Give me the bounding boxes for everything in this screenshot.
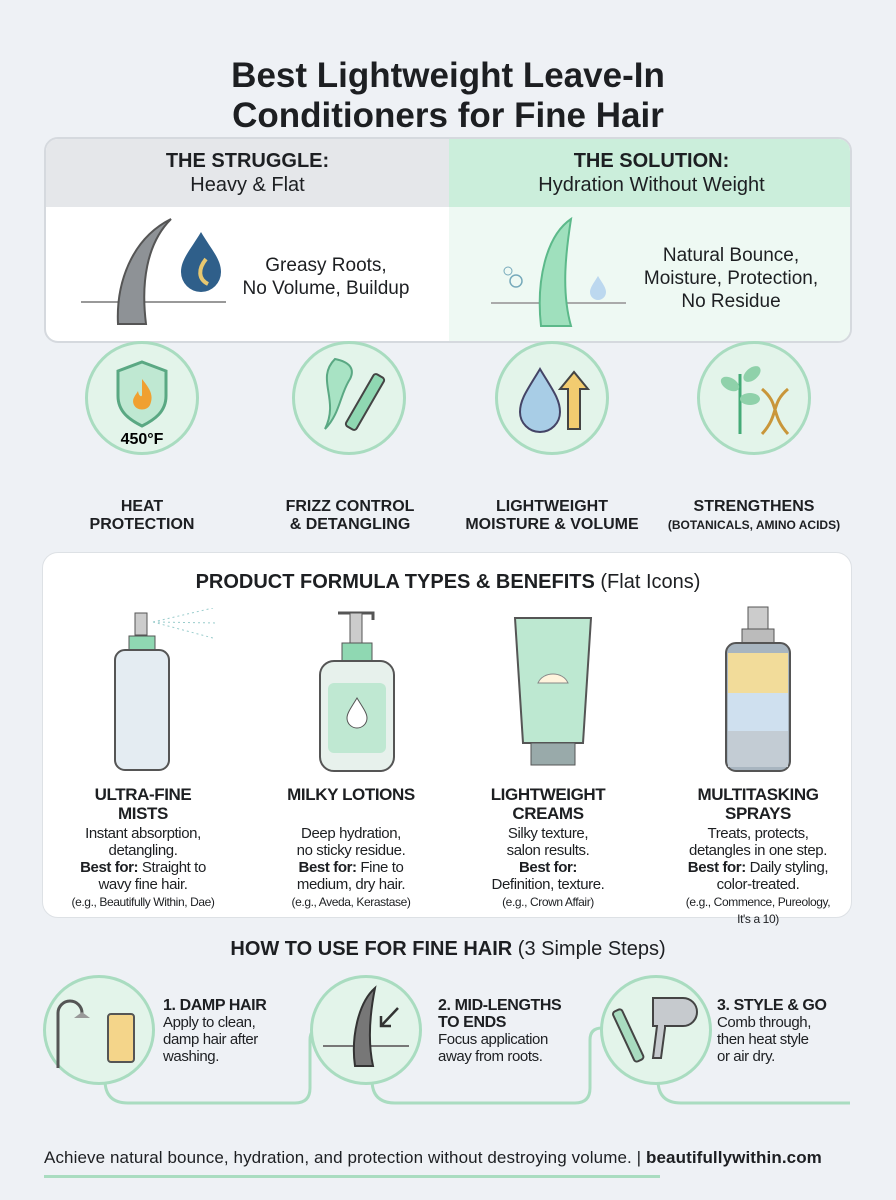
- footer: Achieve natural bounce, hydration, and protection without destroying volume. | beautifullywithin.com: [44, 1148, 822, 1167]
- product: creams: CREAMS: [512, 804, 584, 823]
- title: Best Lightweight Leave-In: [231, 56, 665, 95]
- product: mists: wavy fine hair.: [98, 876, 188, 893]
- product: creams: Silky texture,: [508, 825, 588, 842]
- product: sprays: Treats, protects,: [707, 825, 808, 842]
- solution header: [449, 139, 854, 207]
- solution text: Moisture, Protection,: [644, 268, 818, 289]
- product: creams: Best for:: [519, 859, 577, 876]
- product: mists: ULTRA-FINE: [95, 785, 191, 804]
- product: sprays: detangles in one step.: [689, 842, 827, 859]
- product: lotions: no sticky residue.: [297, 842, 405, 859]
- product: sprays: SPRAYS: [725, 804, 791, 823]
- icon: heat protection: [85, 341, 199, 455]
- solution text: Natural Bounce,: [663, 245, 799, 266]
- icon: multitasking spray: [725, 606, 791, 772]
- connector lines: [104, 1026, 850, 1104]
- icon: light hair strand: [491, 217, 626, 327]
- step 2: Focus application: [438, 1031, 548, 1048]
- icon: comb and dryer: [600, 975, 712, 1085]
- step 2: away from roots.: [438, 1048, 542, 1065]
- icon row: benefits: [85, 341, 840, 533]
- step 2: TO ENDS: [438, 1014, 506, 1031]
- product: mists: [72, 785, 214, 909]
- icon row: benefits: HEAT: [121, 498, 163, 515]
- icon row: benefits: LIGHTWEIGHT: [496, 498, 608, 515]
- icon: cream tube: [514, 617, 592, 766]
- solution header: THE SOLUTION:: [574, 150, 729, 172]
- struggle header: THE STRUGGLE:: [166, 150, 329, 172]
- product: creams: [491, 785, 606, 909]
- product: sprays: MULTITASKING: [697, 785, 819, 804]
- section heading: how to use: HOW TO USE FOR FINE HAIR (3 Simple Steps): [230, 938, 666, 960]
- icon row: benefits: FRIZZ CONTROL: [286, 498, 414, 515]
- step 3: 3. STYLE & GO: [717, 997, 826, 1014]
- icon row: benefits: (BOTANICALS, AMINO ACIDS): [668, 518, 840, 532]
- icon: lotion bottle: [319, 612, 395, 772]
- solution text: [644, 245, 818, 312]
- icon: shower: [43, 975, 155, 1085]
- product: mists: MISTS: [118, 804, 168, 823]
- solution text: No Residue: [681, 291, 781, 312]
- solution header: Hydration Without Weight: [538, 174, 765, 196]
- product: sprays: color-treated.: [717, 876, 799, 893]
- product: creams: Definition, texture.: [492, 876, 604, 893]
- struggle header: Heavy & Flat: [190, 174, 305, 196]
- product: sprays: [686, 785, 830, 926]
- product: mists: (e.g., Beautifully Within, Dae): [72, 895, 214, 909]
- title: [231, 56, 665, 135]
- icon: strengthens: [697, 341, 811, 455]
- icon: heavy hair strand: [81, 218, 226, 325]
- product: mists: Instant absorption,: [85, 825, 201, 842]
- step 3: Comb through,: [717, 1014, 811, 1031]
- product: lotions: [287, 785, 415, 909]
- product: creams: LIGHTWEIGHT: [491, 785, 605, 804]
- section heading: PRODUCT FORMULA TYPES & BENEFITS (Flat Icons): [196, 571, 700, 593]
- struggle text: [243, 255, 409, 299]
- struggle header: [46, 139, 449, 207]
- icon row: benefits: & DETANGLING: [290, 516, 410, 533]
- product: sprays: It's a 10): [737, 912, 779, 926]
- product: creams: salon results.: [507, 842, 589, 859]
- icon: heat protection: 450°F: [121, 431, 164, 448]
- step 3: [600, 975, 826, 1085]
- struggle text: Greasy Roots,: [265, 255, 387, 276]
- product: mists: Best for: Straight to: [80, 859, 206, 876]
- step 2: 2. MID-LENGTHS: [438, 997, 561, 1014]
- panel: struggle vs solution: [44, 137, 852, 343]
- product: mists: detangling.: [108, 842, 178, 859]
- product: lotions: Deep hydration,: [301, 825, 401, 842]
- icon: hair strand arrow: [310, 975, 422, 1085]
- icon: moisture volume: [495, 341, 609, 455]
- step 1: [43, 975, 266, 1085]
- step 3: or air dry.: [717, 1048, 775, 1065]
- step 1: Apply to clean,: [163, 1014, 255, 1031]
- panel: product formula types: [42, 552, 852, 918]
- product: creams: (e.g., Crown Affair): [502, 895, 594, 909]
- step 1: 1. DAMP HAIR: [163, 997, 266, 1014]
- icon row: benefits: STRENGTHENS: [694, 498, 814, 515]
- icon row: benefits: MOISTURE & VOLUME: [465, 516, 639, 533]
- step 2: [310, 975, 562, 1085]
- step 1: damp hair after: [163, 1031, 258, 1048]
- step 1: washing.: [163, 1048, 219, 1065]
- struggle text: No Volume, Buildup: [243, 278, 409, 299]
- icon row: benefits: PROTECTION: [90, 516, 194, 533]
- product: lotions: (e.g., Aveda, Kerastase): [292, 895, 410, 909]
- product: sprays: (e.g., Commence, Pureology,: [686, 895, 830, 909]
- icon: frizz control: [292, 341, 406, 455]
- product: lotions: Best for: Fine to: [299, 859, 403, 876]
- product: lotions: medium, dry hair.: [297, 876, 405, 893]
- title: Conditioners for Fine Hair: [232, 96, 664, 135]
- product: lotions: MILKY LOTIONS: [287, 785, 415, 804]
- product: sprays: Best for: Daily styling,: [688, 859, 828, 876]
- step 3: then heat style: [717, 1031, 809, 1048]
- icon: mist bottle: [114, 608, 215, 771]
